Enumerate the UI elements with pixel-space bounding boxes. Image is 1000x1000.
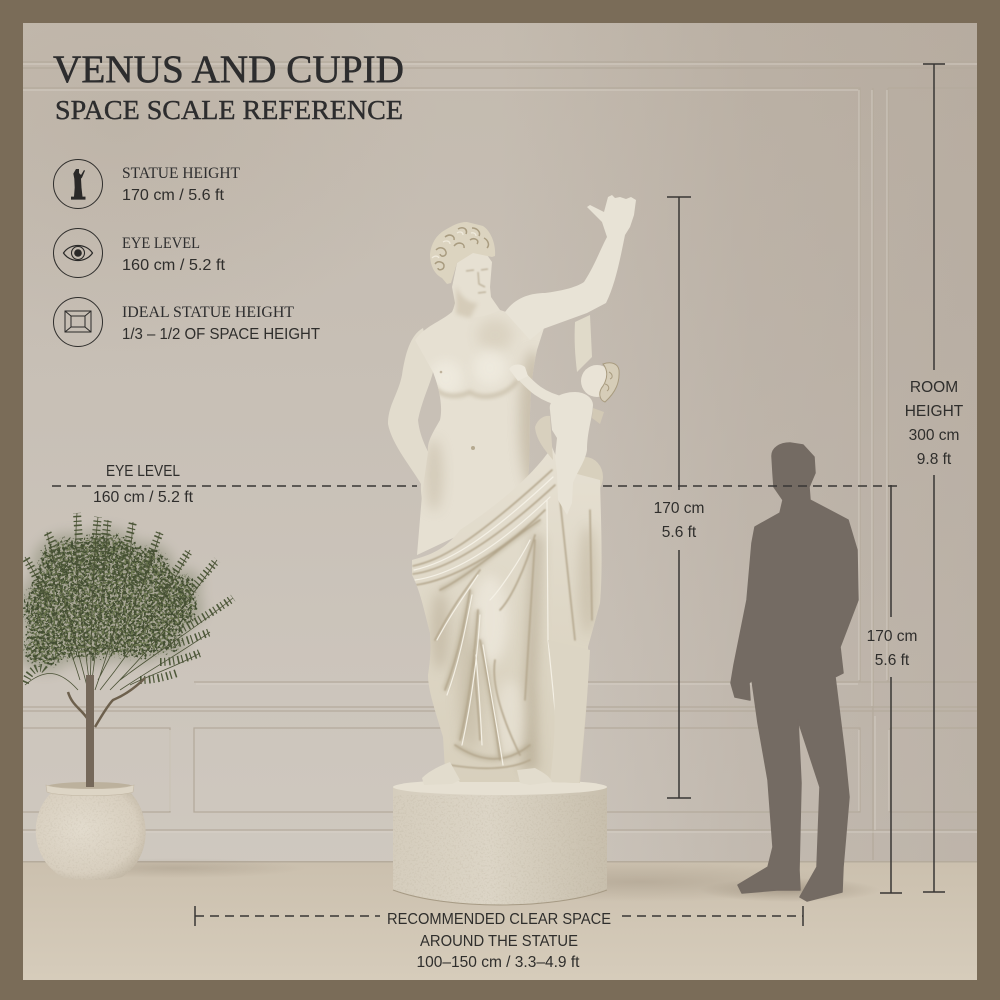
round cloth behind cupid <box>567 457 603 497</box>
dimension: human height: 170 cm <box>867 628 917 645</box>
subtitle: SPACE SCALE REFERENCE <box>55 95 403 125</box>
icon: eye <box>54 228 102 278</box>
dimension: room height: HEIGHT <box>905 403 964 420</box>
torso <box>415 300 547 555</box>
eye level label: EYE LEVEL <box>106 463 180 480</box>
trunk and branches <box>68 675 145 786</box>
left arm <box>388 328 463 524</box>
text: ideal statue height: 1/3 – 1/2 OF SPACE HEIGHT <box>122 326 321 343</box>
dimension: recommended clear space: AROUND THE STATUE <box>420 933 578 950</box>
dimension: room height <box>905 64 964 892</box>
dimension: statue height: 5.6 ft <box>662 524 697 541</box>
eye level label: 160 cm / 5.2 ft <box>93 489 194 506</box>
eye level dashed line <box>52 485 902 487</box>
cupid <box>509 315 619 515</box>
icon: room frame <box>54 298 102 346</box>
raised arm <box>505 195 636 340</box>
text: statue height: STATUE HEIGHT <box>122 165 241 182</box>
text: eye level: EYE LEVEL <box>122 235 200 252</box>
dimension: statue height: 170 cm <box>654 500 704 517</box>
dimension: room height: ROOM <box>910 379 958 396</box>
text: eye level: 160 cm / 5.2 ft <box>122 257 226 274</box>
statue: Venus and Cupid <box>388 195 636 785</box>
text: eye level <box>122 235 226 274</box>
foliage <box>17 513 233 690</box>
dimension: room height: 300 cm <box>909 427 959 444</box>
text: statue height <box>122 165 241 204</box>
eye level label <box>93 463 194 506</box>
plant pot <box>36 775 146 880</box>
dimension: recommended clear space: 100–150 cm / 3.3–4.9 ft <box>416 954 580 971</box>
hair <box>430 222 495 284</box>
right support column <box>548 640 590 783</box>
dimension: statue height <box>654 197 704 798</box>
floor <box>23 858 977 980</box>
wall panel mouldings <box>23 62 977 860</box>
dimension: human height: 5.6 ft <box>875 652 910 669</box>
dimension: human height <box>867 485 917 893</box>
dimension: room height: 9.8 ft <box>917 451 952 468</box>
feet <box>422 762 552 785</box>
plinth <box>393 779 607 905</box>
dimension: recommended clear space <box>195 906 803 971</box>
text: ideal statue height: IDEAL STATUE HEIGHT <box>122 304 295 321</box>
title: VENUS AND CUPID <box>53 48 404 91</box>
text: statue height: 170 cm / 5.6 ft <box>122 187 225 204</box>
text: ideal statue height <box>122 304 321 343</box>
human silhouette <box>731 443 858 901</box>
potted tree <box>17 513 233 880</box>
skirt drapery <box>412 447 602 783</box>
neck and face <box>452 245 500 318</box>
dimension: recommended clear space: RECOMMENDED CLEAR SPACE <box>387 911 611 928</box>
icon: statue <box>54 160 102 208</box>
